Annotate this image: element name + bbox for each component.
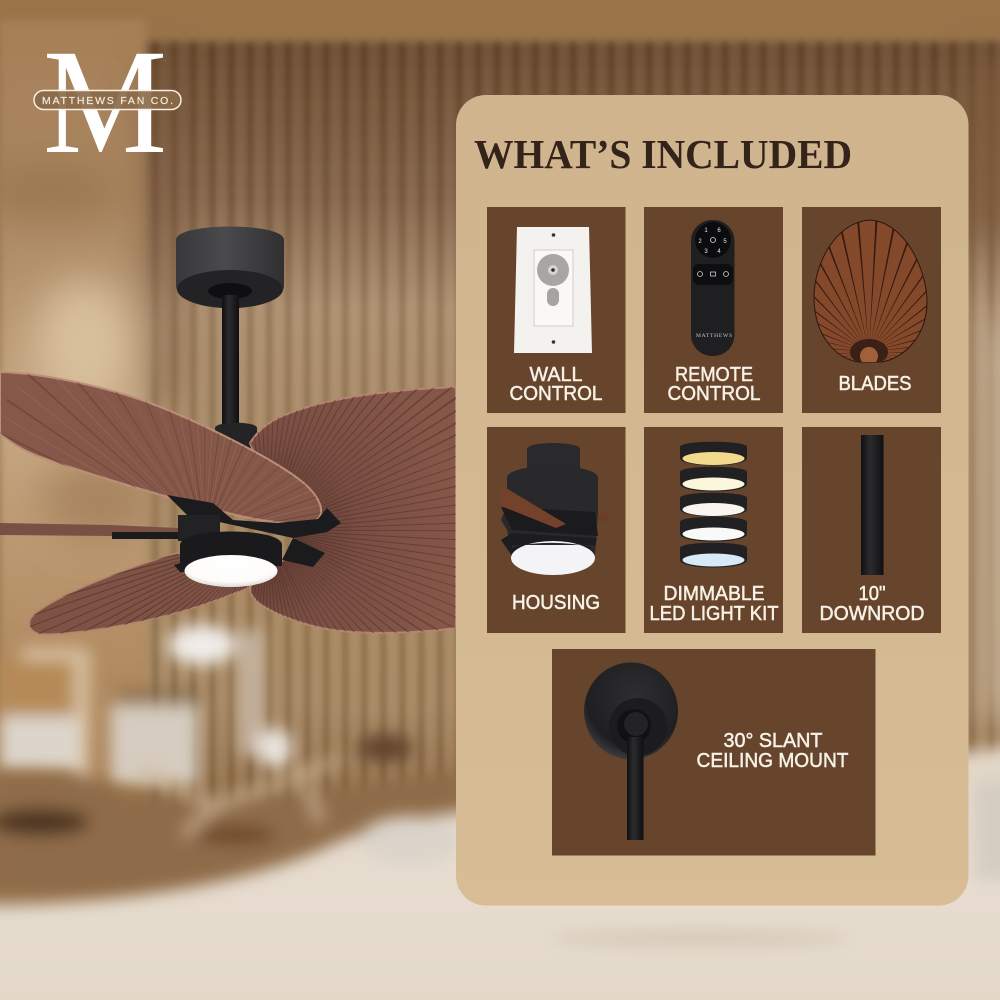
icon: stacked colour temperature lights xyxy=(680,442,747,568)
icon: remote control xyxy=(691,220,734,356)
logo: Matthews Fan Co.: M xyxy=(43,19,167,185)
label: dimmable: DIMMABLE xyxy=(664,583,764,605)
label: LED light kit: LED LIGHT KIT xyxy=(650,603,778,625)
blade: upper left xyxy=(0,371,322,523)
icon: remote control: MATTHEWS xyxy=(696,333,732,339)
label: 10 inch: 10" xyxy=(858,583,886,605)
logo: Matthews Fan Co.: MATTHEWS FAN CO. xyxy=(42,95,173,107)
card: housing xyxy=(487,427,626,633)
label: downrod: DOWNROD xyxy=(820,603,924,625)
label: ceiling mount: CEILING MOUNT xyxy=(696,750,848,772)
icon: housing xyxy=(501,443,608,575)
icon: wall control xyxy=(514,227,592,353)
icon: remote control: 1 xyxy=(704,228,708,234)
icon: remote control: 3 xyxy=(704,249,708,255)
label: remote control line 2: CONTROL xyxy=(668,383,760,405)
blade: lower left xyxy=(29,552,252,635)
card: downrod xyxy=(802,427,941,633)
label: 30 degree slant: 30° SLANT xyxy=(724,730,822,752)
label: housing: HOUSING xyxy=(512,592,600,614)
icon: remote control: 4 xyxy=(717,249,721,255)
icon: remote control: 6 xyxy=(717,228,721,234)
panel: what's included xyxy=(456,95,968,906)
title: WHAT’S INCLUDED xyxy=(474,131,852,177)
label: wall control: WALL xyxy=(530,364,582,386)
card: remote control xyxy=(644,207,783,413)
icon: remote control: 5 xyxy=(723,239,727,245)
label: blades: BLADES xyxy=(838,373,912,395)
blade: far left xyxy=(0,523,178,539)
canopy xyxy=(176,226,284,308)
label: remote control: REMOTE xyxy=(675,364,753,386)
blade brackets xyxy=(167,495,341,572)
card: ceiling mount xyxy=(552,649,876,856)
downrod xyxy=(222,295,239,427)
card: LED light kit xyxy=(644,427,783,633)
blade: right xyxy=(248,386,456,634)
icon: palm blade xyxy=(814,220,928,362)
label: wall control line 2: CONTROL xyxy=(510,383,602,405)
light kit xyxy=(180,532,282,587)
icon: remote control: 2 xyxy=(698,239,702,245)
icon: downrod xyxy=(861,435,884,575)
card: wall control xyxy=(487,207,626,413)
icon: slant ceiling mount xyxy=(584,662,678,840)
motor collar xyxy=(215,423,257,450)
ceiling fan product xyxy=(0,226,456,665)
card: blades xyxy=(802,207,941,413)
